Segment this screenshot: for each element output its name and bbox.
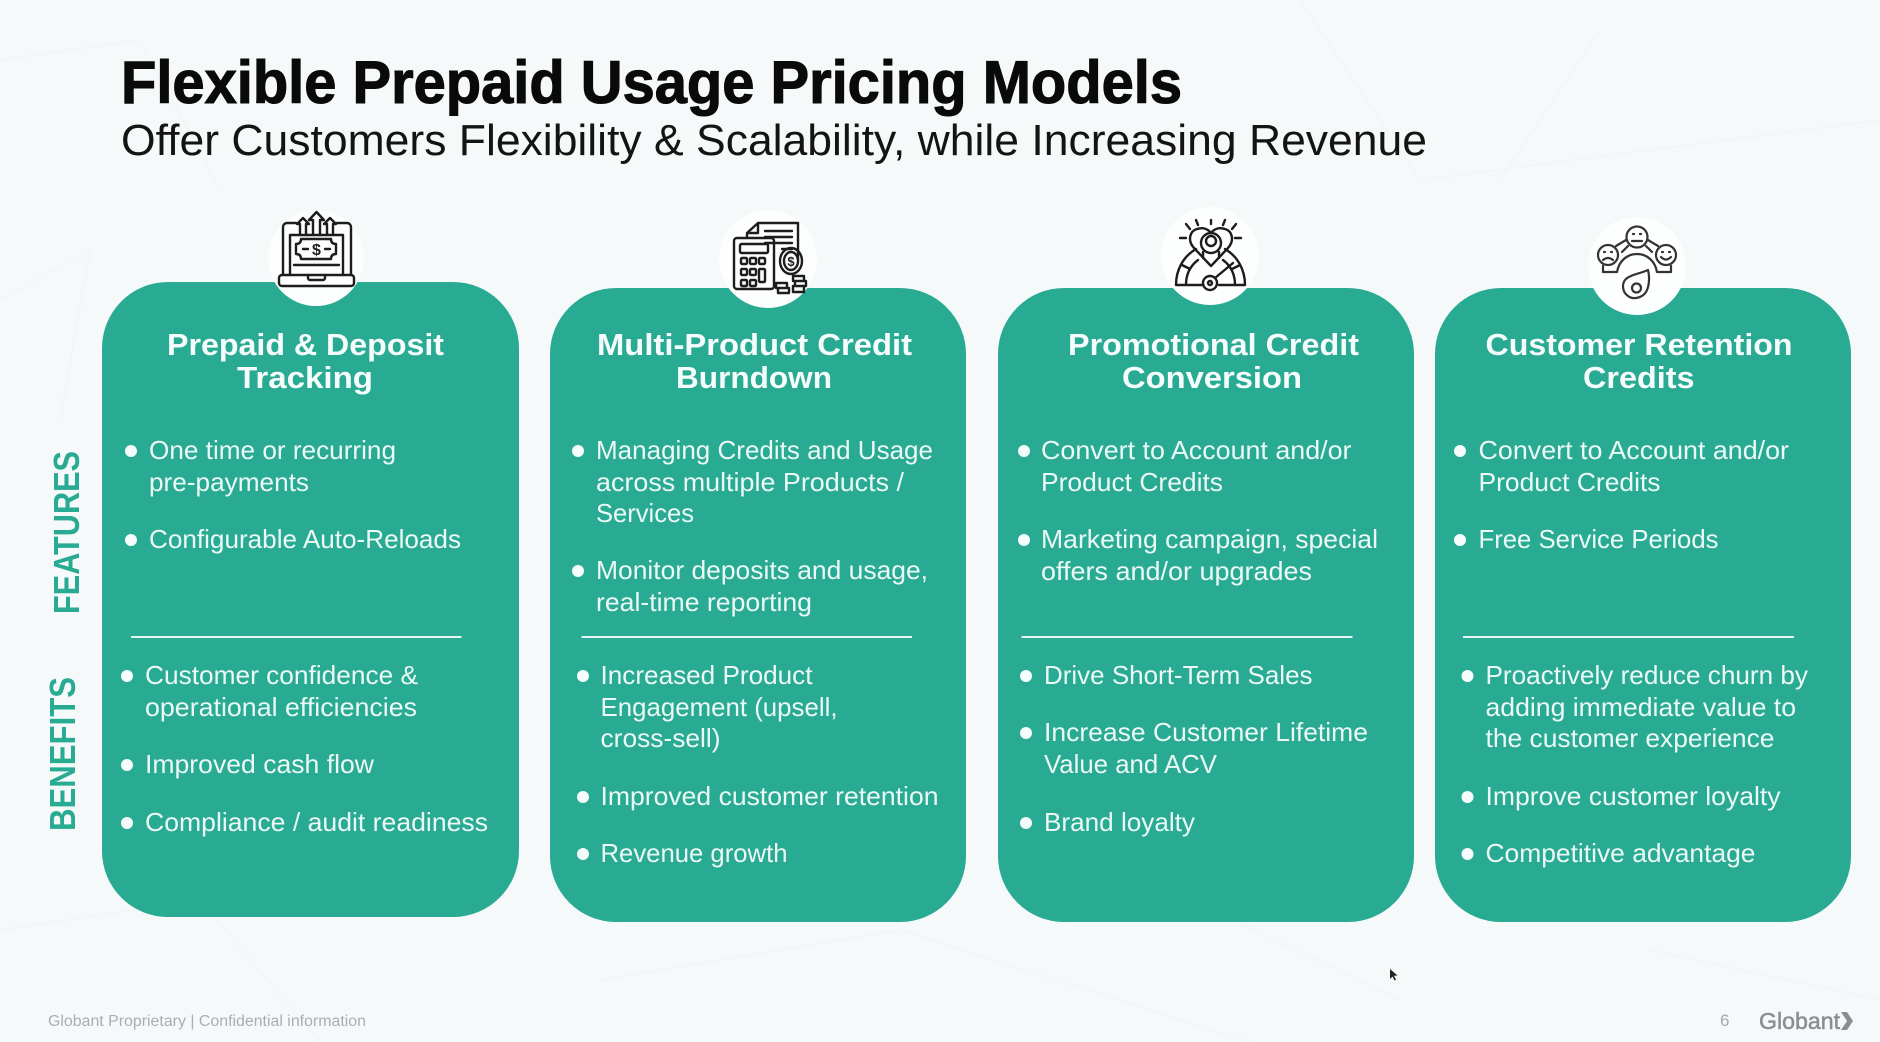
features list: Convert to Account and/or [1478, 435, 1789, 465]
features list: Free Service Periods [1478, 524, 1718, 554]
benefits list [1462, 660, 1808, 868]
benefits list [577, 660, 938, 868]
benefits list: Customer confidence & [145, 660, 418, 690]
title: Flexible Prepaid Usage Pricing Models [121, 49, 1182, 116]
features list: Managing Credits and Usage [596, 435, 933, 465]
benefits list: Improved customer retention [600, 781, 938, 811]
features list: Product Credits [1478, 467, 1660, 497]
features list: Services [596, 498, 694, 528]
features list: across multiple Products / [596, 467, 905, 497]
features list: real-time reporting [596, 587, 812, 617]
card heading: Multi-Product Credit [597, 327, 912, 362]
card heading [597, 327, 912, 395]
side label: features: FEATURES [46, 451, 87, 614]
card heading: Credits [1583, 360, 1694, 395]
benefits list: adding immediate value to [1486, 692, 1796, 722]
features list: Monitor deposits and usage, [596, 555, 928, 585]
footer: page number: 6 [1720, 1011, 1729, 1030]
card heading: Prepaid & Deposit [167, 327, 444, 362]
icon: heart, person and gauge [1176, 220, 1245, 290]
features list [572, 435, 933, 617]
icon: laptop with money and arrows: $ [312, 242, 321, 259]
features list [1454, 435, 1789, 554]
card heading: Burndown [676, 360, 832, 395]
panel: customer retention credits [1435, 217, 1851, 922]
card heading [1486, 327, 1792, 395]
icon: mouse cursor [1390, 969, 1398, 980]
card heading: Promotional Credit [1068, 327, 1359, 362]
card heading [1068, 327, 1359, 395]
features list: Marketing campaign, special [1041, 524, 1378, 554]
benefits list: Revenue growth [600, 838, 788, 868]
icon: calculator, document and coins [734, 223, 806, 293]
features list: Configurable Auto-Reloads [149, 524, 461, 554]
benefits list: Brand loyalty [1044, 807, 1195, 837]
benefits list: cross-sell) [600, 723, 720, 753]
benefits list: Drive Short-Term Sales [1044, 660, 1312, 690]
footer: brand logo: Globant [1759, 1008, 1841, 1034]
benefits list: Engagement (upsell, [600, 692, 838, 722]
panel: promotional credit conversion [998, 207, 1414, 922]
benefits list: Proactively reduce churn by [1486, 660, 1808, 690]
footer: confidentiality note: Globant Proprietary | Confidential information [48, 1013, 366, 1030]
features list: pre-payments [149, 467, 309, 497]
benefits list: Increase Customer Lifetime [1044, 717, 1368, 747]
benefits list: operational efficiencies [145, 692, 417, 722]
features list: offers and/or upgrades [1041, 556, 1312, 586]
icon: calculator, document and coins: $ [787, 254, 795, 269]
panel: prepaid and deposit tracking [102, 210, 519, 917]
benefits list: Value and ACV [1044, 749, 1218, 779]
card heading [167, 327, 444, 395]
benefits list: Improve customer loyalty [1486, 781, 1780, 811]
panel: multi-product credit burndown [550, 210, 966, 922]
benefits list: Increased Product [600, 660, 813, 690]
features list: One time or recurring [149, 435, 396, 465]
icon: satisfaction faces and gauge [1598, 226, 1676, 298]
subtitle: Offer Customers Flexibility & Scalability, while Increasing Revenue [121, 116, 1427, 165]
side label: benefits: BENEFITS [42, 677, 83, 831]
benefits list: Improved cash flow [145, 749, 374, 779]
benefits list [1020, 660, 1368, 837]
features list [1018, 435, 1378, 586]
card heading: Conversion [1122, 360, 1302, 395]
card heading: Customer Retention [1486, 327, 1792, 362]
benefits list: the customer experience [1486, 723, 1774, 753]
benefits list: Compliance / audit readiness [145, 807, 488, 837]
features list [125, 435, 461, 554]
features list: Product Credits [1041, 467, 1223, 497]
features list: Convert to Account and/or [1041, 435, 1352, 465]
benefits list [121, 660, 488, 837]
icon: laptop with money and arrows [279, 212, 354, 286]
card heading: Tracking [237, 360, 373, 395]
benefits list: Competitive advantage [1486, 838, 1756, 868]
